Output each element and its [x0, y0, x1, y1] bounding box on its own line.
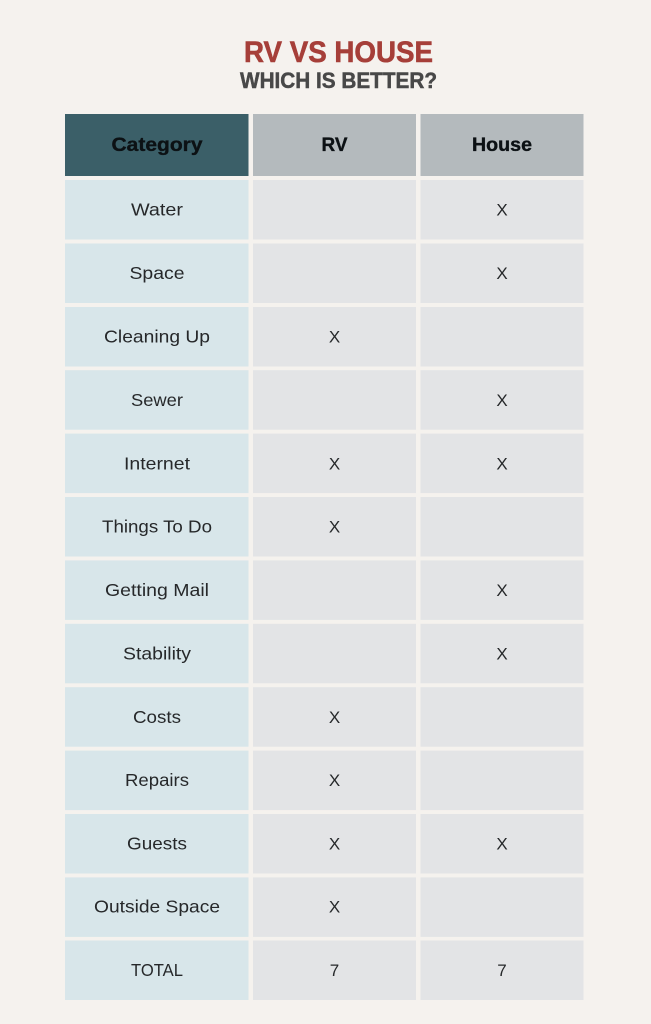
row: Water [65, 180, 584, 240]
row: Outside Space [65, 877, 584, 937]
row: Outside Space: Outside Space [94, 896, 220, 916]
row: Outside Space: X [329, 898, 340, 916]
header: RV: RV [322, 135, 348, 156]
row: Internet: X [329, 454, 340, 474]
row: Sewer: X [496, 391, 508, 410]
header: Category: Category [112, 135, 203, 156]
header: House: House [472, 135, 532, 156]
header: Category [65, 114, 248, 176]
row: Costs [65, 687, 584, 747]
row: Internet: Internet [124, 454, 190, 474]
title: WHICH IS BETTER? [240, 68, 437, 93]
row: Space: Space [130, 263, 184, 283]
row: Things To Do: Things To Do [102, 516, 212, 536]
row: Stability: X [496, 644, 508, 664]
row: Sewer [65, 370, 584, 430]
title: RV VS HOUSE [244, 36, 433, 69]
row: TOTAL [65, 940, 584, 1000]
row: Costs: Costs [133, 707, 181, 727]
row: Cleaning Up: X [329, 328, 340, 346]
row: Guests: Guests [127, 834, 187, 854]
row: Internet [65, 434, 584, 493]
row: Repairs: Repairs [125, 770, 189, 790]
header: RV [253, 114, 416, 176]
row: Things To Do: X [329, 518, 340, 536]
row: Repairs [65, 751, 584, 810]
row: Cleaning Up: Cleaning Up [104, 326, 210, 346]
row: Space [65, 244, 584, 303]
row: Internet: X [496, 454, 508, 474]
row: Sewer: Sewer [131, 390, 183, 410]
row: Things To Do [65, 497, 584, 556]
row: Getting Mail: Getting Mail [105, 580, 209, 600]
row: TOTAL: 7 [497, 961, 507, 980]
row: Repairs: X [329, 771, 340, 790]
row: Space: X [496, 264, 508, 283]
row: Guests: X [329, 834, 340, 854]
row: TOTAL: 7 [330, 961, 339, 980]
row: Water: X [496, 200, 508, 220]
row: Water: Water [131, 200, 183, 220]
row: Cleaning Up [65, 307, 584, 366]
row: TOTAL: TOTAL [131, 960, 183, 980]
row: Stability [65, 624, 584, 683]
comparison table [65, 114, 584, 1000]
row: Getting Mail [65, 560, 584, 620]
row: Guests [65, 814, 584, 874]
row: Getting Mail: X [496, 581, 508, 600]
header: House [420, 114, 584, 176]
row: Costs: X [329, 708, 340, 727]
row: Stability: Stability [123, 644, 191, 664]
title [240, 36, 437, 93]
row: Guests: X [496, 834, 508, 854]
